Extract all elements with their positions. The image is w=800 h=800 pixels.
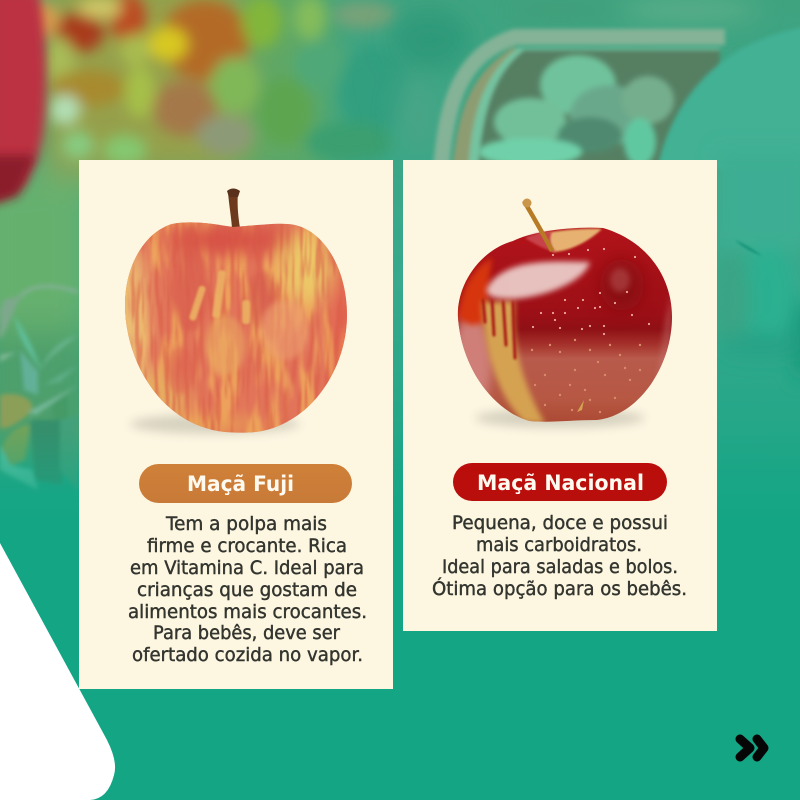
text block: Fuji description: Tem a polpa mais [165,513,327,535]
child face and right side [720,172,800,380]
label pill: Maçã Fuji [139,464,352,503]
text block: Fuji description [128,513,367,666]
text block: Fuji description: Para bebês, deve ser [153,622,340,644]
apple lenticels [532,248,650,335]
text block: Fuji description: firme e crocante. Rica [147,535,347,557]
label pill: Maçã Nacional [453,463,667,501]
panel: Maçã Nacional [403,160,717,631]
glossy highlight [487,262,590,299]
text block: Nacional description: Ideal para saladas e bolos. [442,556,678,578]
white corner shape [0,543,115,800]
top-left foliage blobs [20,0,411,165]
text block: Fuji description: ofertado cozida no vapor. [132,644,363,666]
basket [441,37,725,170]
text block: Nacional description [432,512,687,600]
icon: red apple [450,198,680,430]
apples in basket [478,55,674,166]
text block: Fuji description: alimentos mais crocantes. [128,601,367,623]
icon: fuji apple [116,188,355,440]
text block: Nacional description: Pequena, doce e possui [452,512,668,534]
orange flare [458,258,492,325]
red apple blur [0,0,46,200]
red stripes over streak [483,298,515,358]
text block: Nacional description: Ótima opção para os bebês. [432,576,687,600]
blurred trees, top centre [390,0,760,155]
icon: next arrows [740,739,764,757]
label pill: Maçã Fuji: Maçã Fuji [187,472,294,496]
text block: Nacional description: mais carboidratos. [476,534,642,556]
apple stem [524,201,552,251]
yellow streak [482,300,545,423]
child hair [657,27,800,170]
text block: Fuji description: em Vitamina C. Ideal para [130,557,364,579]
background: blurred orchard photo with teal wash [0,0,800,490]
panel: Maçã Fuji [79,160,393,689]
text block: Fuji description: crianças que gostam de [137,579,357,601]
foliage leaves [0,286,78,490]
apple cavity [537,229,602,252]
lower left pink shading [458,314,494,396]
label pill: Maçã Nacional: Maçã Nacional [477,471,644,495]
left foliage base [0,0,330,460]
